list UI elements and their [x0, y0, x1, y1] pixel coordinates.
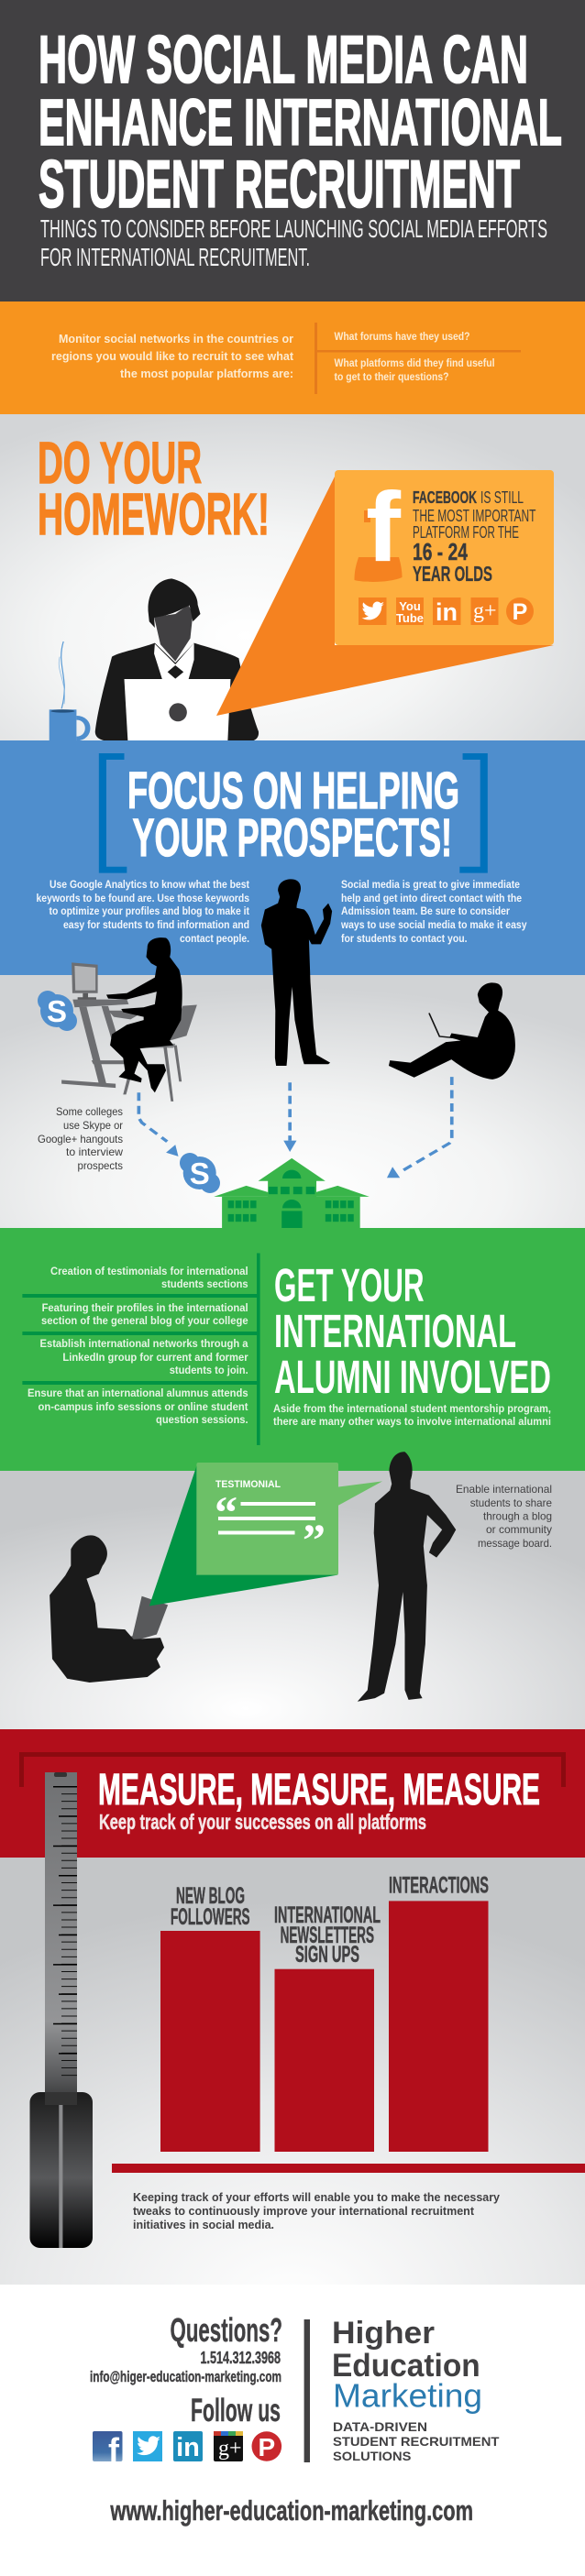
heading: GET YOUR — [274, 1259, 425, 1311]
icon: coffee mug — [50, 641, 88, 742]
testimonial card — [196, 1463, 382, 1575]
questions text: to get to their questions? — [334, 372, 449, 383]
logo: higher education marketing: Education — [332, 2348, 480, 2384]
questions text: What platforms did they find useful — [334, 358, 495, 369]
bar: new blog followers — [160, 1883, 260, 2152]
alumni intro text: there are many other ways to involve international alumni — [273, 1415, 551, 1428]
icons: social row: g+ — [473, 599, 497, 623]
facebook statement: 16 - 24 — [413, 538, 468, 565]
caption: skype: use Skype or — [63, 1119, 123, 1132]
panel: focus on helping your prospects — [0, 740, 585, 975]
analytics text: keywords to be found are. Use those keywords — [37, 892, 249, 904]
facebook statement: YEAR OLDS — [413, 562, 492, 586]
alumni idea list: on-campus info sessions or online student — [39, 1400, 248, 1413]
questions text: What forums have they used? — [334, 332, 469, 343]
alumni intro text: Aside from the international student mentorship program, — [273, 1402, 551, 1415]
alumni idea list: Establish international networks through a — [40, 1337, 248, 1350]
bracket — [19, 1752, 566, 1787]
immediate help text: Admission team. Be sure to consider — [341, 904, 510, 917]
bar: interactions — [389, 1873, 489, 2152]
icons: social row — [359, 597, 534, 626]
bar: international newsletters sign ups: SIGN UPS — [295, 1942, 359, 1968]
contact details: info@higer-education-marketing.com — [90, 2368, 281, 2385]
immediate help text: ways to use social media to make it easy — [340, 918, 527, 931]
bar: new blog followers: NEW BLOG — [176, 1883, 245, 1909]
heading — [38, 430, 270, 547]
share caption: message board. — [478, 1537, 552, 1550]
arrow: right — [387, 1077, 452, 1178]
bar: international newsletters sign ups — [274, 1902, 381, 2152]
contact details — [90, 2311, 282, 2428]
icons: follow us: P — [258, 2433, 275, 2461]
alumni idea list: Featuring their profiles in the international — [42, 1301, 248, 1314]
subtitle: FOR INTERNATIONAL RECRUITMENT. — [40, 243, 310, 271]
heading: HOMEWORK! — [38, 481, 270, 547]
closing text: Keeping track of your efforts will enable you to make the necessary — [133, 2190, 501, 2204]
standing woman silhouette — [358, 1452, 456, 1702]
icons: follow us: in — [176, 2433, 200, 2462]
logo: higher education marketing: STUDENT RECRUITMENT — [333, 2434, 500, 2449]
callout beam — [216, 477, 554, 716]
panel: testimonials — [0, 1452, 585, 1729]
facebook statement — [413, 488, 535, 586]
alumni intro text — [273, 1402, 551, 1428]
caption: skype: Google+ hangouts — [38, 1133, 123, 1145]
testimonial card: TESTIMONIAL — [215, 1479, 281, 1490]
caption: skype: Some colleges — [56, 1105, 123, 1118]
bar: new blog followers: FOLLOWERS — [171, 1904, 250, 1930]
closing text: tweaks to continuously improve your international recruitment — [133, 2204, 475, 2218]
alumni idea list: LinkedIn group for current and former — [62, 1351, 248, 1364]
panel: measure — [0, 1729, 585, 2285]
share caption: students to share — [470, 1496, 552, 1509]
icons: follow us — [93, 2431, 281, 2469]
analytics text: to optimize your profiles and blog to make it — [50, 904, 249, 917]
header panel — [0, 0, 585, 301]
seated woman silhouette — [50, 1535, 164, 1683]
logo: higher education marketing: Marketing — [333, 2377, 482, 2415]
monitor text: regions you would like to recruit to see what — [51, 349, 294, 363]
main title — [39, 23, 562, 222]
bar: interactions: INTERACTIONS — [389, 1873, 489, 1899]
panel: alumni — [0, 1228, 585, 1471]
arrow: centre — [283, 1082, 296, 1152]
panel: footer — [0, 2285, 585, 2576]
icon: facebook trophy — [354, 471, 402, 582]
testimonial card: “ — [215, 1486, 237, 1538]
alumni idea list: Creation of testimonials for international — [50, 1265, 248, 1277]
caption: skype: to interview — [66, 1145, 123, 1158]
share caption: through a blog — [483, 1510, 552, 1523]
panel: monitor social networks — [0, 301, 585, 414]
alumni idea list: Ensure that an international alumnus attends — [28, 1387, 248, 1399]
callout: facebook — [335, 470, 554, 645]
alumni idea list: students sections — [161, 1277, 248, 1290]
facebook statement: PLATFORM FOR THE — [413, 523, 519, 542]
immediate help text: for students to contact you. — [341, 932, 468, 945]
brackets — [99, 753, 488, 873]
logo: higher education marketing: Higher — [332, 2316, 435, 2351]
facebook statement: IS STILL — [480, 488, 524, 507]
alumni idea list: question sessions. — [156, 1413, 248, 1426]
contact details: 1.514.312.3968 — [200, 2349, 281, 2367]
analytics text: easy for students to find information and — [63, 918, 249, 931]
icons: social row: Tube — [396, 611, 424, 625]
icon: skype lower: S — [190, 1156, 210, 1190]
share caption: or community — [486, 1523, 552, 1536]
contact details: Questions? — [171, 2311, 282, 2349]
closing text — [133, 2190, 501, 2231]
logo: higher education marketing — [332, 2316, 500, 2463]
icon: skype left — [38, 991, 77, 1031]
facebook statement: FACEBOOK — [413, 488, 477, 507]
icon: college building — [214, 1158, 370, 1230]
testimonial beam — [149, 1466, 338, 1606]
heading: DO YOUR — [38, 430, 202, 496]
contact details: Follow us — [191, 2393, 281, 2428]
closing text: initiatives in social media. — [133, 2218, 274, 2231]
monitor text — [51, 332, 294, 380]
standing student with phone — [261, 879, 332, 1066]
alumni idea list: section of the general blog of your college — [41, 1314, 248, 1327]
bar: international newsletters sign ups: INTERNATIONAL — [274, 1902, 381, 1928]
immediate help text: help and get into direct contact with the — [341, 892, 522, 904]
icons: follow us: g+ — [218, 2437, 242, 2461]
chair — [123, 1005, 197, 1102]
questions text — [334, 332, 495, 383]
person at laptop — [95, 578, 259, 744]
desk and computer — [61, 962, 146, 1088]
logo: higher education marketing: DATA-DRIVEN — [333, 2419, 427, 2434]
student sitting with laptop — [389, 982, 515, 1080]
immediate help text: Social media is great to give immediate — [341, 878, 520, 891]
subtitle — [40, 214, 547, 271]
icon: skype left: S — [47, 994, 67, 1028]
testimonial card: ” — [303, 1514, 326, 1565]
bar chart — [160, 1873, 489, 2152]
icon: skype lower — [180, 1153, 220, 1193]
share caption: Enable international — [456, 1483, 552, 1496]
analytics text — [37, 878, 249, 945]
bar: international newsletters sign ups: NEWSLETTERS — [281, 1923, 374, 1948]
alumni idea list — [28, 1265, 248, 1426]
immediate help text — [340, 878, 527, 945]
logo: higher education marketing: SOLUTIONS — [333, 2449, 411, 2463]
monitor text: Monitor social networks in the countries or — [59, 332, 293, 345]
subheading: Keep track of your successes on all platforms — [99, 1810, 426, 1834]
alumni idea list: students to join. — [170, 1364, 248, 1376]
heading — [274, 1259, 551, 1403]
icons: social row: in — [436, 598, 458, 626]
heading — [127, 762, 459, 868]
caption: skype — [38, 1105, 123, 1172]
analytics text: Use Google Analytics to know what the best — [50, 878, 249, 891]
panel: prospects and college — [0, 879, 585, 1230]
icons: social row: You — [399, 599, 421, 613]
caption: skype: prospects — [77, 1159, 123, 1172]
panel: do your homework — [0, 414, 585, 744]
icon: measuring tape — [29, 1772, 93, 2248]
laptop screen — [101, 1596, 168, 1648]
monitor text: the most popular platforms are: — [120, 367, 293, 380]
seated student silhouette — [106, 937, 182, 1092]
arrow: left — [138, 1092, 178, 1156]
icon: facebook trophy: f — [366, 471, 402, 582]
share caption — [456, 1483, 552, 1550]
analytics text: contact people. — [180, 932, 249, 945]
icons: social row: P — [513, 599, 527, 625]
icons: follow us: f — [108, 2431, 120, 2469]
